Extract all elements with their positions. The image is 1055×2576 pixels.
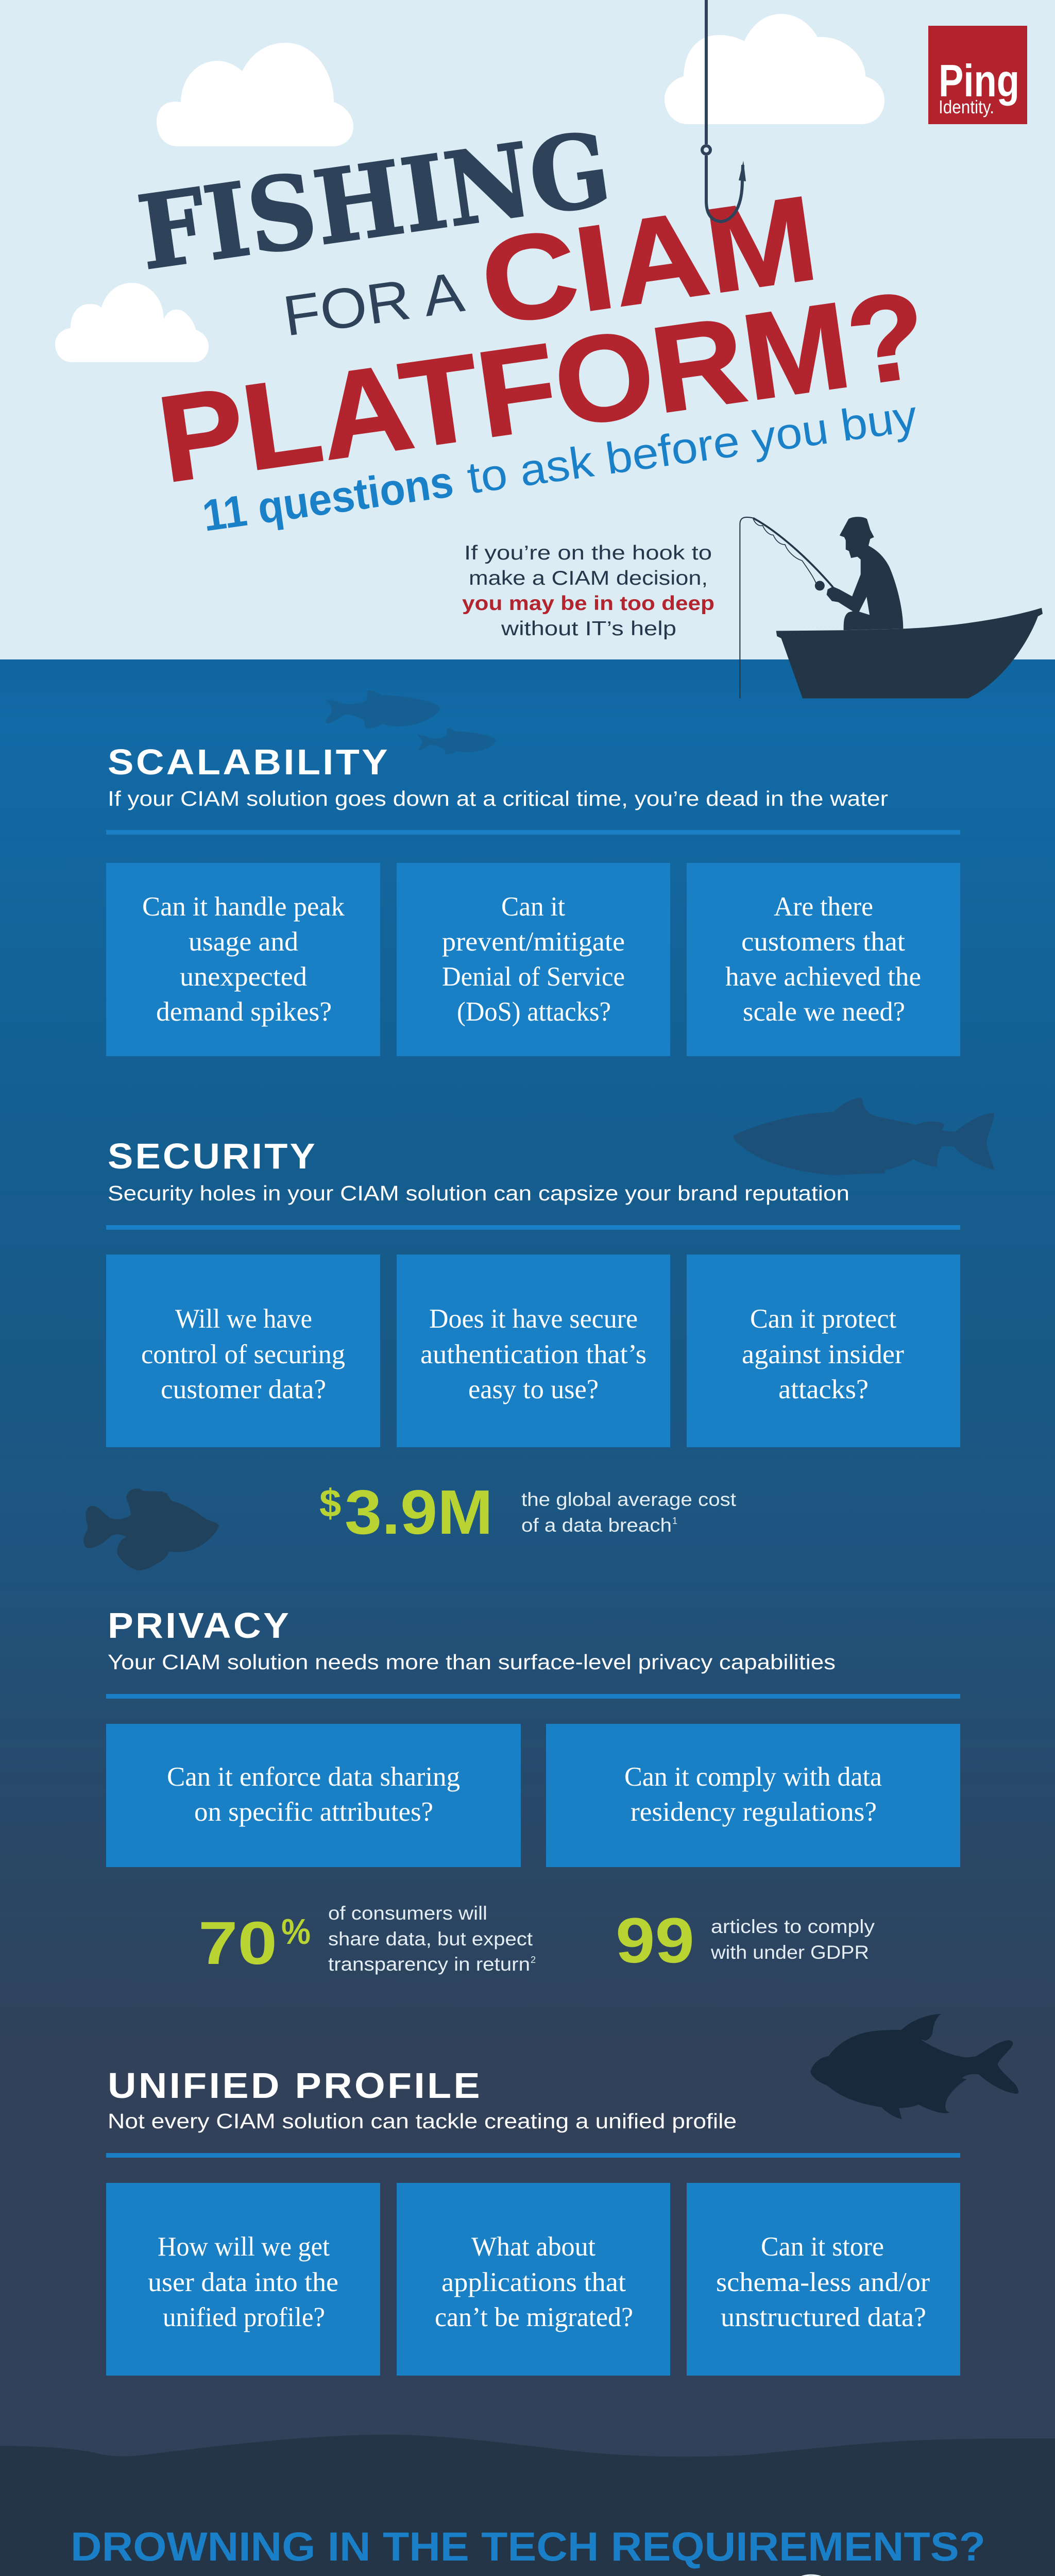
question card 3: have achieved the: [725, 962, 921, 992]
question card 3: scale we need?: [743, 997, 905, 1027]
stat: 70% of consumers: %: [281, 1911, 311, 1952]
question card 2: Does it have secure: [429, 1304, 638, 1334]
stat: 70% of consumers: of consumers will: [328, 1903, 487, 1924]
stat: 99 articles: 99: [616, 1905, 694, 1976]
logo: Ping Identity: [928, 26, 1027, 124]
question card 2: can’t be migrated?: [435, 2302, 633, 2332]
heading: unified profile: UNIFIED PROFILE: [108, 2065, 482, 2106]
stat: data breach cost: the global average cost: [521, 1489, 737, 1510]
water background: [0, 659, 1055, 2473]
question card 1: user data into the: [148, 2267, 338, 2297]
question card 2: [397, 863, 670, 1056]
stat: data breach cost: 1: [672, 1516, 677, 1526]
subheading: privacy: Your CIAM solution needs more than surface-level privacy capabilities: [108, 1650, 836, 1674]
question card 2: Denial of Service: [442, 962, 625, 992]
cloud: small left: [55, 283, 209, 362]
question card 3: attacks?: [778, 1375, 869, 1404]
stat: 99 articles: articles to comply: [711, 1916, 875, 1937]
question card 2: authentication that’s: [420, 1340, 646, 1369]
question card 2: (DoS) attacks?: [457, 997, 611, 1027]
question card 3: against insider: [742, 1340, 904, 1369]
stat: 70% of consumers: 2: [531, 1955, 536, 1965]
heading: scalability: SCALABILITY: [108, 742, 390, 782]
question card 3: [687, 863, 960, 1056]
question card 1: demand spikes?: [156, 997, 332, 1027]
fish: large dark: [810, 2014, 1018, 2119]
question card 3: unstructured data?: [721, 2302, 926, 2332]
icon: fishing hook: [702, 0, 746, 222]
question card 1: [106, 2183, 380, 2376]
cloud: left: [157, 43, 353, 146]
stat: 70% of consumers: 70: [198, 1909, 277, 1977]
question card 1: Will we have: [175, 1304, 312, 1334]
subtitle: to ask before you buy: [464, 391, 920, 503]
question card 1: How will we get: [158, 2232, 330, 2262]
question card 2: applications that: [441, 2267, 626, 2297]
question card 3: [687, 2183, 960, 2376]
subheading: unified profile: Not every CIAM solution can tackle creating a unified profile: [108, 2109, 737, 2133]
title: FOR A: [279, 260, 468, 348]
stat: data breach cost: [319, 1477, 737, 1547]
question card 3: Are there: [774, 892, 873, 922]
question card 2: Can it: [501, 892, 565, 922]
subheading: security: Security holes in your CIAM solution can capsize your brand reputation: [108, 1181, 849, 1205]
question card 1: [106, 863, 380, 1056]
intro text: If you’re on the hook to: [464, 542, 712, 564]
question card 3: Can it store: [761, 2232, 884, 2262]
question card 2: easy to use?: [468, 1375, 599, 1404]
intro text: without IT’s help: [501, 618, 676, 640]
question card 1: unexpected: [180, 962, 307, 992]
stat: data breach cost: of a data breach: [521, 1515, 672, 1536]
question card 3: [687, 1255, 960, 1447]
question card 1: on specific attributes?: [194, 1797, 433, 1827]
panel: scalability: [106, 742, 960, 1056]
title: PLATFORM?: [150, 265, 934, 509]
fish: salmon: [733, 1098, 994, 1175]
question card 3: customers that: [741, 927, 905, 957]
cloud: right: [665, 14, 884, 124]
icon: life ring: [729, 2555, 893, 2576]
subtitle: [199, 391, 920, 541]
sky background: [0, 0, 1055, 659]
question card 1: unified profile?: [163, 2302, 325, 2332]
question card 2: [397, 1255, 670, 1447]
title: FISHING: [132, 110, 618, 293]
stat: 99 articles: with under GDPR: [710, 1942, 869, 1963]
callout: drowning heading: DROWNING IN THE TECH REQUIREMENTS?: [71, 2523, 985, 2569]
question card 1: Can it enforce data sharing: [167, 1762, 460, 1792]
title: [132, 110, 934, 509]
stat: 99 articles: [616, 1905, 875, 1976]
question card 1: [106, 1255, 380, 1447]
question card 2: Can it comply with data: [624, 1762, 882, 1792]
panel: unified profile: [106, 2065, 960, 2376]
question card 2: prevent/mitigate: [442, 927, 625, 957]
logo: Ping Identity: Ping: [939, 55, 1019, 106]
title: CIAM: [473, 171, 825, 350]
stat: 70% of consumers: share data, but expect: [328, 1928, 533, 1950]
question card 3: schema-less and/or: [716, 2267, 930, 2297]
subtitle: 11 questions: [199, 457, 456, 541]
heading: privacy: PRIVACY: [108, 1605, 291, 1646]
fish: pair near surface: [326, 690, 496, 754]
stat: 70% of consumers: [198, 1903, 536, 1977]
question card 2: What about: [471, 2232, 595, 2262]
icon: fisherman in boat: [740, 517, 1043, 698]
panel: security: [106, 1136, 960, 1447]
fish: round: [83, 1488, 219, 1570]
question card 1: usage and: [189, 927, 298, 957]
seabed hill: [0, 2435, 1055, 2576]
question card 3: Can it protect: [750, 1304, 896, 1334]
question card 1: control of securing: [141, 1340, 345, 1369]
panel: privacy: [106, 1605, 960, 1867]
intro text: make a CIAM decision,: [469, 567, 708, 589]
stat: 70% of consumers: transparency in return: [328, 1954, 530, 1975]
question card 2: [546, 1724, 960, 1867]
intro text: [462, 542, 714, 640]
stat: data breach cost: $: [319, 1482, 341, 1526]
intro text: you may be in too deep: [462, 592, 714, 615]
question card 2: [397, 2183, 670, 2376]
question card 1: [106, 1724, 521, 1867]
question card 1: Can it handle peak: [142, 892, 345, 922]
subheading: scalability: If your CIAM solution goes down at a critical time, you’re dead in the water: [108, 787, 888, 810]
question card 1: customer data?: [161, 1375, 326, 1404]
logo: Ping Identity: Identity.: [939, 96, 994, 117]
question card 2: residency regulations?: [631, 1797, 877, 1827]
heading: security: SECURITY: [108, 1136, 317, 1176]
stat: data breach cost: 3.9M: [345, 1477, 493, 1547]
